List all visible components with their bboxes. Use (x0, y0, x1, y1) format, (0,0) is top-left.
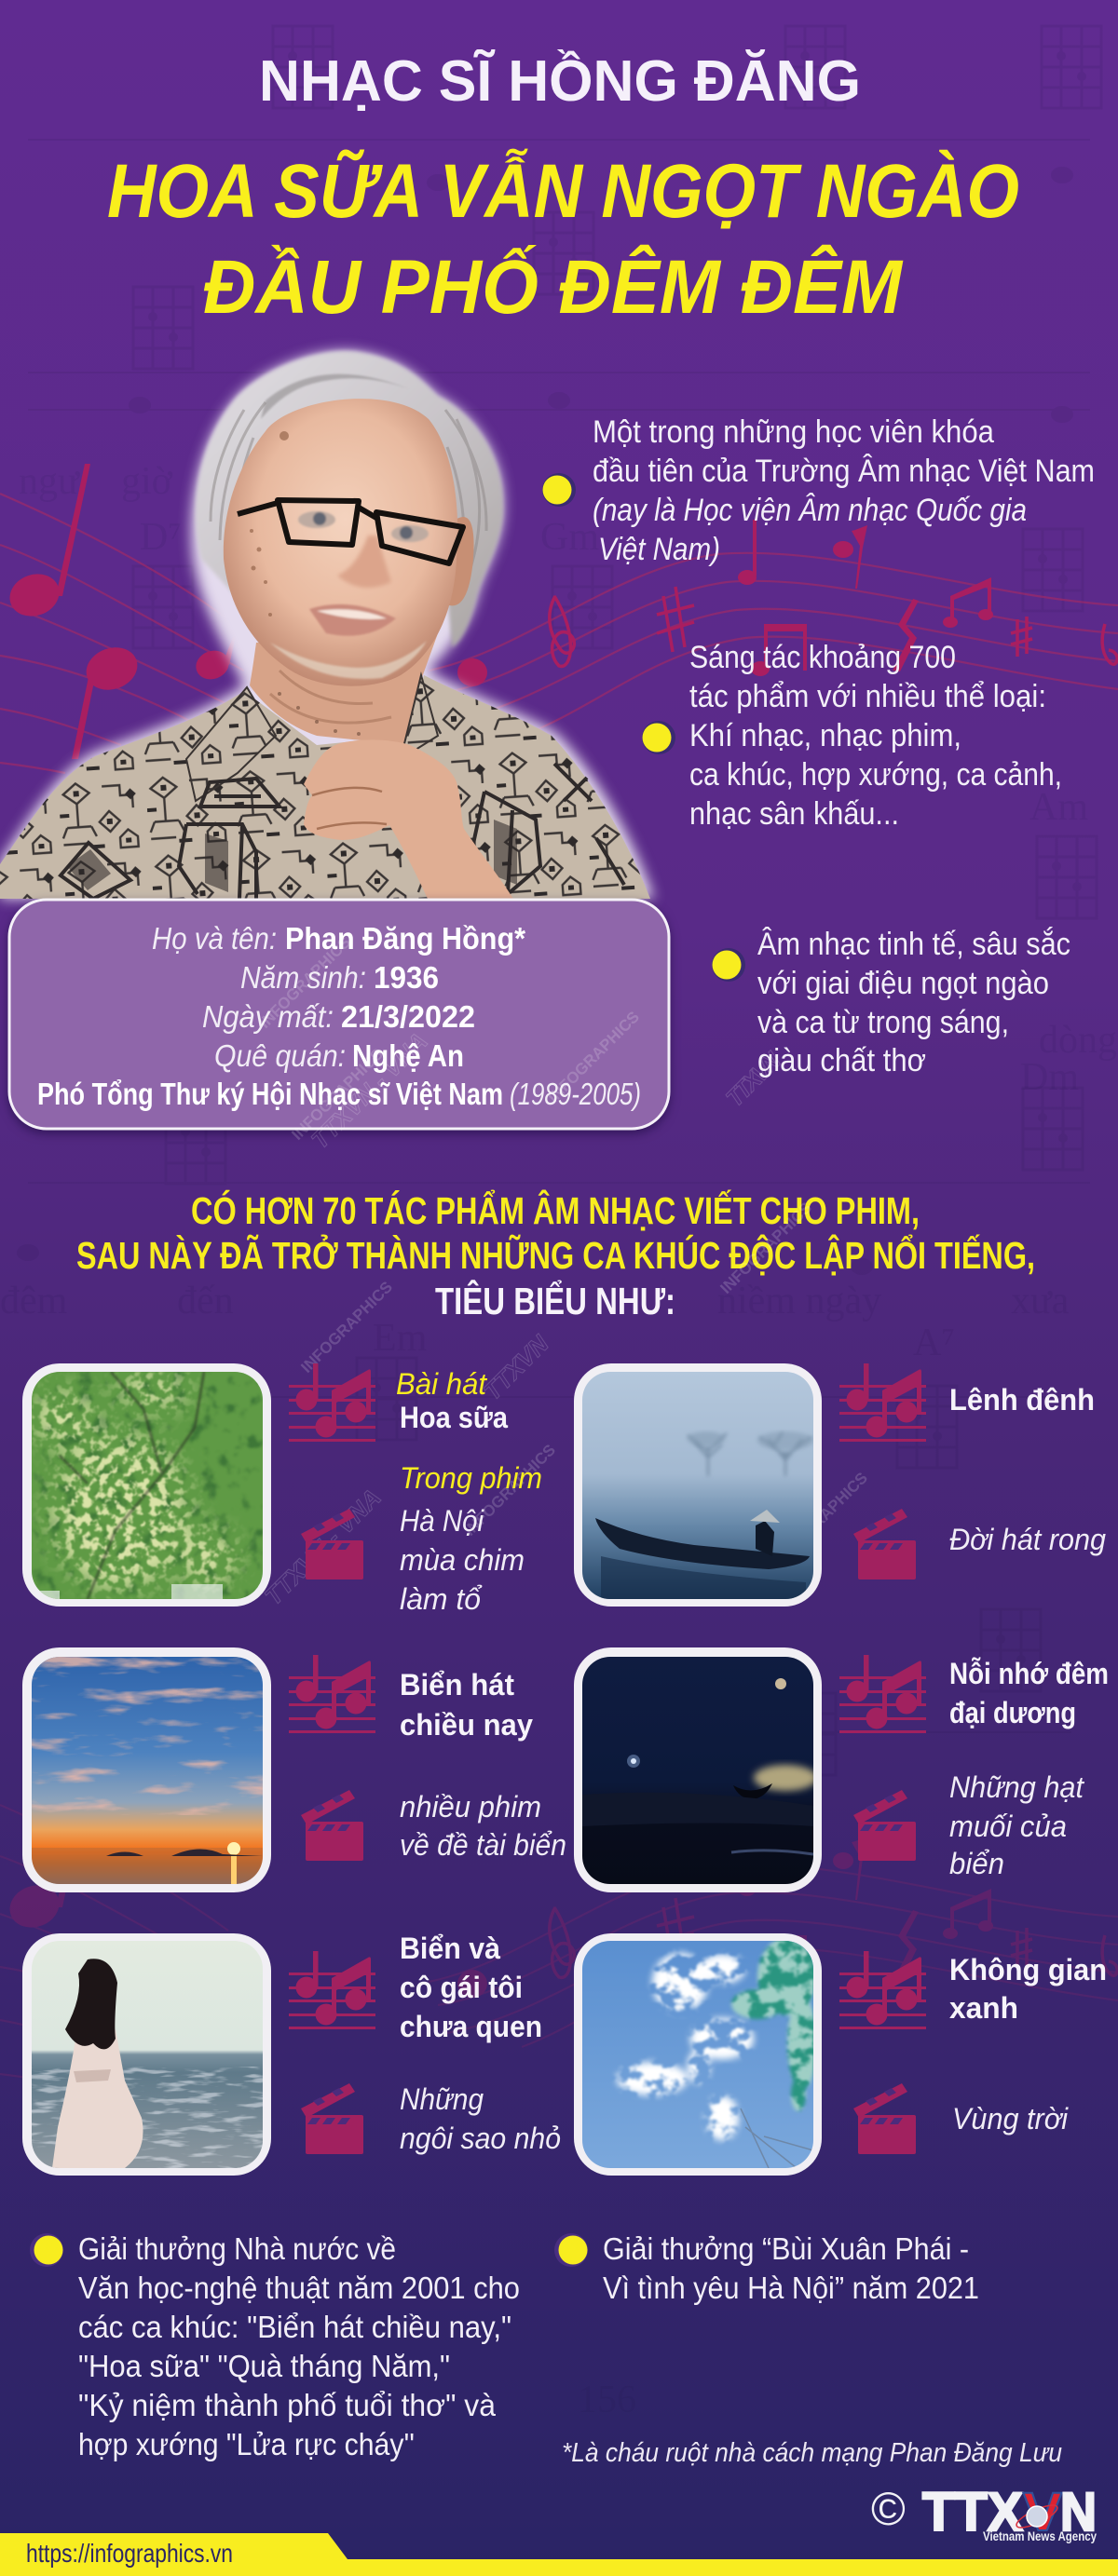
position: (1989-2005) (510, 1077, 641, 1111)
sheet music background pattern: giờ (121, 460, 173, 503)
watermarks: TTXVN (720, 1046, 787, 1112)
film name (949, 1770, 1084, 1880)
death date: 21/3/2022 (341, 999, 475, 1034)
chest motifs (61, 764, 624, 899)
sheet music background pattern: Em (373, 1317, 428, 1360)
watermarks: INFOGRAPHICS (716, 1199, 815, 1297)
award: state prize (30, 2231, 520, 2461)
text: Giải thưởng “Bùi Xuân Phái - (603, 2231, 969, 2266)
dot (554, 2233, 588, 2267)
song name: đại dương (949, 1696, 1076, 1729)
song name: Hoa sữa (400, 1401, 508, 1434)
position: Phó Tổng Thư ký Hội Nhạc sĩ Việt Nam (37, 1077, 503, 1111)
photo: sunset on the sea (32, 1657, 263, 1884)
icon: film clapper (301, 1509, 363, 1579)
icon: music (289, 1951, 375, 2029)
film name: Những hạt (949, 1770, 1084, 1804)
photo: boat in the mist (582, 1372, 813, 1599)
icon: film clapper (301, 1790, 363, 1861)
text (593, 414, 1095, 567)
birth year: Năm sinh: (240, 960, 366, 995)
card: Không gian xanh (574, 1933, 1107, 2176)
song name: Biển và (400, 1932, 500, 1965)
song name (400, 1932, 542, 2043)
photo frame (22, 1647, 271, 1892)
bullet: 700 works (642, 640, 1062, 832)
icon: music (289, 1655, 375, 1733)
photo frame (574, 1933, 822, 2176)
text: (nay là Học viện Âm nhạc Quốc gia (593, 493, 1027, 528)
film name: muối của (949, 1810, 1067, 1843)
glasses (238, 500, 463, 563)
card: Lênh đênh (574, 1363, 1106, 1607)
film name (400, 1790, 566, 1862)
watermarks: INFOGRAPHICS (288, 1045, 387, 1144)
text: với giai điệu ngọt ngào (757, 966, 1049, 1001)
title: yellow slogan (107, 149, 1019, 330)
watermarks: TTXVN - VNA (259, 1484, 387, 1610)
source url: https://infographics.vn (26, 2539, 233, 2568)
birth year: 1936 (374, 960, 439, 995)
film name (400, 1504, 525, 1616)
icon: music (839, 1363, 926, 1442)
watermarks: INFOGRAPHICS (297, 1278, 396, 1376)
text: "Hoa sữa" "Quà tháng Năm," (78, 2349, 450, 2383)
section heading: CÓ HƠN 70 TÁC PHẨM ÂM NHẠC VIẾT CHO PHIM, (191, 1188, 920, 1232)
watermarks: INFOGRAPHICS (460, 1441, 559, 1539)
full name (152, 921, 525, 956)
text: ca khúc, hợp xướng, ca cảnh, (689, 757, 1062, 793)
hair (196, 351, 503, 647)
hometown (214, 1038, 464, 1073)
photo: blue sky with clouds (582, 1941, 813, 2168)
song name: xanh (949, 1991, 1018, 2025)
sheet music background pattern: đến (177, 1280, 234, 1322)
watermarks: TTXVN - VNA (306, 1027, 433, 1154)
text (78, 2231, 520, 2461)
bullet: style (712, 927, 1070, 1078)
text: Giải thưởng Nhà nước về (78, 2231, 396, 2266)
ear (449, 517, 474, 605)
watermarks: INFOGRAPHICS (255, 933, 354, 1032)
photo frame (22, 1933, 271, 2176)
card: Biển và cô gái tôi chưa quen (22, 1932, 561, 2176)
sheet music background pattern: Am (1029, 786, 1088, 829)
film name: Những (400, 2082, 484, 2116)
icon: music (289, 1363, 375, 1442)
film name: nhiều phim (400, 1790, 541, 1824)
film name: Đời hát rong (949, 1523, 1106, 1556)
film label: Trong phim (400, 1461, 542, 1495)
dot (30, 2233, 63, 2267)
film name: mùa chim (400, 1543, 525, 1577)
icon: music (839, 1951, 926, 2029)
hometown: Nghệ An (352, 1038, 464, 1073)
film name: biển (949, 1847, 1004, 1880)
text: giàu chất thơ (757, 1043, 926, 1078)
collar (186, 675, 438, 801)
hometown: Quê quán: (214, 1038, 346, 1073)
title: musician name: NHẠC SĨ HỒNG ĐĂNG (259, 49, 861, 114)
red musical staves upper (0, 464, 1118, 773)
nose (337, 536, 391, 588)
portrait of Hồng Đăng (0, 351, 654, 899)
text: Sáng tác khoảng 700 (689, 640, 956, 675)
text: Một trong những học viên khóa (593, 414, 994, 450)
birth year (240, 960, 439, 995)
song name: chưa quen (400, 2010, 542, 2043)
song name: chiều nay (400, 1708, 533, 1742)
section heading (76, 1188, 1035, 1322)
icon: film clapper (853, 1509, 916, 1579)
red musical staves lower (0, 1775, 1118, 2084)
icon: music (839, 1655, 926, 1733)
section heading: TIÊU BIỂU NHƯ: (435, 1279, 675, 1322)
photo: moonlit sea at night (582, 1657, 817, 1884)
photo: girl facing the sea (32, 1941, 263, 2168)
death date: Ngày mất: (202, 999, 334, 1034)
beard stubble (270, 641, 427, 679)
text (757, 927, 1070, 1078)
photo frame (574, 1363, 822, 1607)
text: Khí nhạc, nhạc phim, (689, 718, 961, 753)
song name (949, 1953, 1107, 2025)
bullet: student (542, 414, 1095, 567)
shirt (0, 675, 650, 899)
film name: làm tổ (400, 1582, 483, 1616)
full name: Họ và tên: (152, 921, 277, 956)
photo: milkwood tree in flower (32, 1372, 263, 1599)
letters TTX: TTX (922, 2482, 1023, 2542)
sheet music background pattern: niềm ngày (717, 1280, 881, 1322)
death date (202, 999, 475, 1034)
copyright symbol: © (871, 2483, 906, 2535)
watermarks (255, 933, 871, 1610)
globe (1014, 2501, 1060, 2531)
text: hợp xướng "Lửa rực cháy'' (78, 2427, 415, 2461)
song name: Biển hát (400, 1668, 514, 1702)
icon: film clapper (853, 2083, 916, 2154)
text (689, 640, 1062, 832)
photo frame (574, 1647, 822, 1892)
sheet music background pattern: xưa (1011, 1280, 1070, 1322)
info box: biography (9, 900, 669, 1129)
eyes (298, 511, 429, 542)
watermarks: TTXVN (478, 1329, 554, 1405)
photo frame (22, 1363, 271, 1607)
watermarks: TTXVN - VNA (650, 1409, 778, 1536)
full name: Phan Đăng Hồng* (285, 921, 525, 956)
letter N: N (1060, 2482, 1097, 2542)
film name: ngôi sao nhỏ (400, 2122, 561, 2155)
footnote: *Là cháu ruột nhà cách mạng Phan Đăng Lưu (562, 2438, 1062, 2468)
sheet music background pattern: D⁷ (140, 516, 182, 559)
dot (542, 473, 576, 507)
film name: Vùng trời (952, 2102, 1069, 2135)
award: Bùi Xuân Phái (554, 2231, 979, 2305)
song name: Lênh đênh (949, 1383, 1095, 1417)
sheet music background pattern: dòng (1039, 1019, 1117, 1062)
film name (400, 2082, 561, 2155)
hand (304, 739, 513, 899)
song name: Không gian (949, 1953, 1107, 1986)
text: nhạc sân khấu... (689, 796, 899, 832)
text: "Kỷ niệm thành phố tuổi thơ" và (78, 2388, 497, 2422)
text: Vì tình yêu Hà Nội” năm 2021 (603, 2271, 979, 2305)
song name (949, 1657, 1109, 1729)
song label: Bài hát (396, 1367, 487, 1401)
card: Hoa sữa (22, 1363, 542, 1616)
sheet music background pattern: ngư (19, 460, 80, 503)
text: Văn học-nghệ thuật năm 2001 cho (78, 2271, 520, 2305)
dot (712, 948, 745, 982)
title: yellow slogan: HOA SỮA VẪN NGỌT NGÀO (107, 149, 1019, 234)
portrait glow (0, 351, 654, 899)
face (224, 399, 457, 686)
sheet music background pattern: A⁷ (913, 1322, 955, 1364)
song name (400, 1668, 533, 1742)
film name: Hà Nội (400, 1504, 484, 1538)
box panel (9, 900, 669, 1129)
sheet music background pattern: 156 (578, 2379, 636, 2421)
icon: film clapper (301, 2083, 363, 2154)
icon: film clapper (853, 1790, 916, 1861)
song name: cô gái tôi (400, 1971, 523, 2004)
text: tác phẩm với nhiều thể loại: (689, 679, 1046, 714)
text: các ca khúc: "Biển hát chiều nay," (78, 2310, 511, 2344)
watermarks: INFOGRAPHICS (544, 1008, 643, 1106)
liver spots (250, 431, 289, 617)
sheet music background pattern: Dm (1020, 1056, 1079, 1099)
title: yellow slogan: ĐẦU PHỐ ĐÊM ĐÊM (203, 244, 904, 330)
sheet music background pattern: Gm (540, 516, 599, 559)
logo: TTXVN (871, 2482, 1097, 2543)
text (603, 2231, 979, 2305)
text: Âm nhạc tinh tế, sâu sắc (757, 927, 1070, 962)
sheet music background pattern: đêm (0, 1280, 68, 1322)
card: Nỗi nhớ đêm đại dương (574, 1647, 1109, 1892)
card: Biển hát chiều nay (22, 1647, 566, 1892)
watermarks: INFOGRAPHICS (772, 1469, 871, 1567)
footer bar (0, 2533, 1118, 2576)
text: và ca từ trong sáng, (757, 1005, 1009, 1040)
neck (250, 633, 438, 745)
tagline: Vietnam News Agency (983, 2529, 1097, 2543)
text: Việt Nam) (598, 532, 720, 567)
dot (642, 721, 675, 754)
letter V: V (1023, 2482, 1062, 2542)
mouth (309, 604, 396, 636)
film name: về đề tài biển (400, 1828, 566, 1862)
